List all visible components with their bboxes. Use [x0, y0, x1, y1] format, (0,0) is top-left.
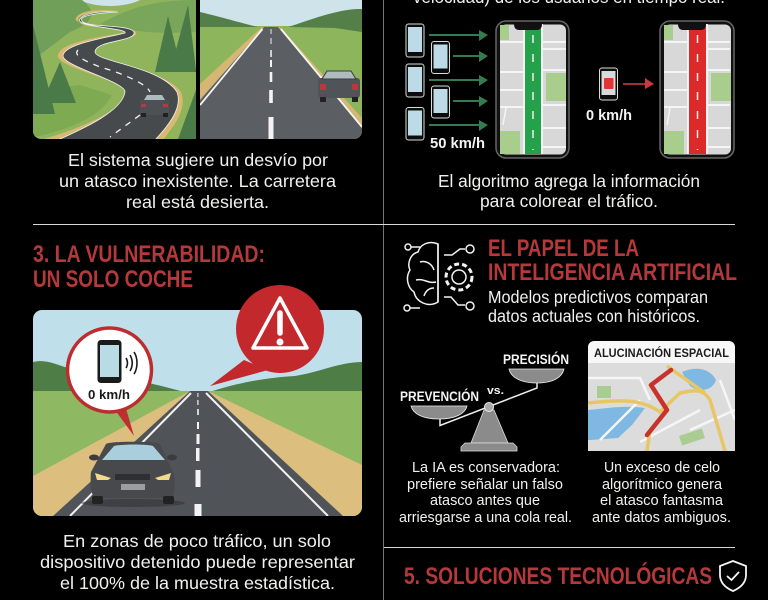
heading: EL PAPEL DE LA: [488, 235, 639, 262]
balance scale: PREVENCIÓN: [400, 389, 479, 404]
caption: En zonas de poco tráfico, un solo: [63, 531, 331, 551]
caption: para colorear el tráfico.: [480, 191, 658, 211]
car: [140, 95, 169, 117]
illustration: empty road with a single car: [33, 310, 362, 516]
lane dashes: [194, 393, 202, 516]
card: spatial hallucination map: ALUCINACIÓN ESPACIAL: [594, 345, 729, 360]
callout: phone at 0 km/h: [68, 328, 152, 436]
phones at 50 km/h: [406, 24, 450, 140]
caption: algorithmic zeal: ante datos ambiguos.: [592, 510, 731, 526]
balance scale: vs.: [487, 385, 504, 397]
card: spatial hallucination map: [588, 341, 735, 451]
caption: un atasco inexistente. La carretera: [59, 171, 336, 191]
panel: how traffic data is aggregated: [406, 0, 734, 211]
caption: real está desierta.: [126, 192, 269, 212]
caption: algorithmic zeal: algorítmico genera: [602, 477, 723, 493]
icon: shield with check: [720, 561, 746, 591]
illustration: winding road: [33, 0, 196, 140]
intro text: datos actuales con históricos.: [488, 306, 700, 326]
lane dashes: [77, 50, 150, 137]
callout: warning triangle: [210, 285, 324, 386]
caption: conservative AI: La IA es conservadora:: [412, 460, 560, 476]
caption: el 100% de la muestra estadística.: [60, 573, 335, 593]
caption: algorithmic zeal: Un exceso de celo: [604, 460, 720, 476]
caption: conservative AI: prefiere señalar un falso: [407, 477, 563, 493]
map phone: green: [496, 21, 569, 158]
caption: dispositivo detenido puede representar: [40, 552, 355, 572]
heading: UN SOLO COCHE: [33, 266, 193, 293]
car: [81, 442, 185, 507]
map phone: red: [660, 21, 734, 158]
car: [318, 71, 360, 102]
illustration: empty real road: [200, 0, 362, 139]
caption: El algoritmo agrega la información: [438, 171, 700, 191]
balance scale: [400, 352, 569, 451]
panel: role of artificial intelligence: [399, 235, 737, 526]
caption: algorithmic zeal: el atasco fantasma: [600, 493, 724, 509]
caption: El sistema sugiere un desvío por: [68, 150, 328, 170]
label: 0 km/h: 0 km/h: [586, 108, 632, 124]
icon: brain with gears: [404, 243, 474, 311]
trees: [33, 5, 196, 139]
panel: false detour: [33, 0, 362, 212]
phone at 0 km/h: [600, 68, 618, 100]
heading: 3. LA VULNERABILIDAD:: [33, 241, 265, 268]
caption: conservative AI: arriesgarse a una cola real.: [399, 510, 572, 526]
caption: conservative AI: atasco antes que: [430, 493, 540, 509]
green arrows: [429, 30, 488, 131]
road: [58, 12, 178, 140]
red route: [647, 370, 671, 435]
callout: phone at 0 km/h: 0 km/h: [88, 387, 130, 402]
road shoulder: [40, 10, 183, 140]
panel: section 3 vulnerability: [33, 241, 362, 593]
red arrow: [623, 78, 654, 89]
balance scale: PRECISIÓN: [503, 352, 569, 367]
label: 50 km/h: 50 km/h: [430, 136, 485, 152]
intro text: Modelos predictivos comparan: [488, 287, 708, 307]
lane dashes: [268, 29, 274, 139]
